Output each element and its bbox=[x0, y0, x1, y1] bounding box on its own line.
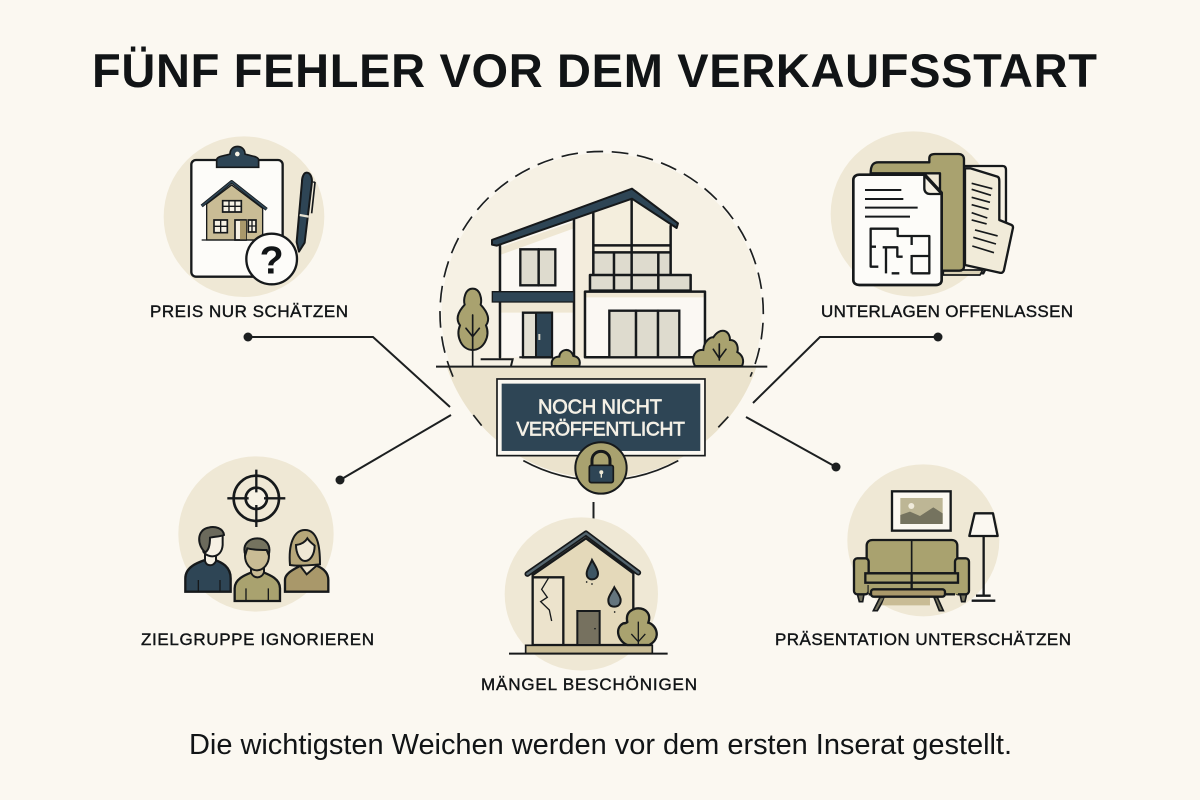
panel: unterlagen offenlassen bbox=[821, 131, 1073, 321]
tree and shrubs bbox=[458, 289, 743, 366]
icon: documents and folder bbox=[831, 131, 1013, 297]
label: UNTERLAGEN OFFENLASSEN bbox=[821, 302, 1073, 321]
icon: people and target bbox=[178, 456, 334, 612]
panel: zielgruppe ignorieren bbox=[141, 456, 374, 649]
label: PRÄSENTATION UNTERSCHÄTZEN bbox=[775, 630, 1071, 649]
sign: noch nicht veröffentlicht: NOCH NICHT bbox=[538, 396, 662, 418]
panel: mängel beschönigen bbox=[481, 517, 697, 694]
label: MÄNGEL BESCHÖNIGEN bbox=[481, 675, 697, 694]
panel: präsentation unterschätzen bbox=[775, 464, 1071, 649]
icon: damaged house bbox=[505, 517, 668, 671]
icon: sofa, picture and lamp bbox=[847, 464, 999, 616]
footer statement: Die wichtigsten Weichen werden vor dem ersten Inserat gestellt. bbox=[189, 729, 1012, 761]
sign: noch nicht veröffentlicht: VERÖFFENTLICHT bbox=[516, 418, 685, 440]
background circle bbox=[436, 151, 767, 480]
title: FÜNF FEHLER VOR DEM VERKAUFSSTART bbox=[92, 44, 1097, 97]
house illustration bbox=[481, 189, 705, 366]
connector lines bbox=[244, 332, 942, 524]
icon: padlock bbox=[575, 442, 627, 494]
sign: noch nicht veröffentlicht bbox=[497, 379, 705, 456]
panel: preis nur schätzen bbox=[150, 136, 348, 321]
icon: clipboard with house: ? bbox=[260, 239, 284, 283]
panel: central house bbox=[436, 151, 767, 494]
label: ZIELGRUPPE IGNORIEREN bbox=[141, 630, 374, 649]
icon: clipboard with house bbox=[164, 136, 324, 297]
label: PREIS NUR SCHÄTZEN bbox=[150, 302, 348, 321]
